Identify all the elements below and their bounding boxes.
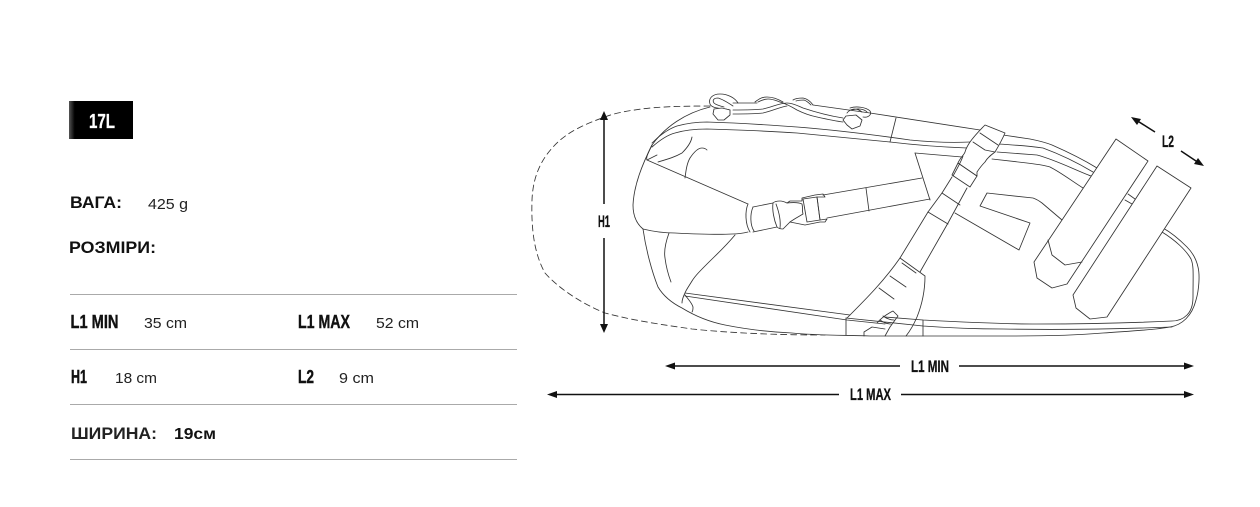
end-cap inner seam — [885, 232, 1193, 324]
bag line drawing — [532, 94, 1199, 336]
lower folds — [665, 233, 671, 282]
compression strap L2 front — [1034, 139, 1148, 288]
spec table: ШИРИНА: — [71, 424, 157, 443]
weight row — [70, 193, 188, 213]
bungee cord loops — [710, 94, 738, 110]
extended roll outline (dashed) — [532, 106, 825, 335]
spec table: H1 — [71, 367, 87, 387]
diagonal strap — [847, 177, 952, 318]
dimension: L1 MAX: L1 MAX — [850, 386, 891, 404]
dimension: L1 MIN — [665, 358, 1194, 376]
dimension: L1 MIN: L1 MIN — [911, 358, 949, 376]
spec table: L1 MAX — [298, 312, 350, 332]
spec table — [70, 294, 517, 460]
spec table: 19см — [174, 426, 216, 443]
dimension: L2: L2 — [1162, 133, 1174, 151]
compression strap L2 rear — [1073, 166, 1191, 319]
top buckle — [952, 163, 977, 187]
dimension: H1: H1 — [598, 213, 610, 231]
side strap buckle — [773, 194, 827, 229]
spec table: 9 cm — [339, 370, 374, 387]
spec table: L1 MIN — [70, 312, 118, 332]
side window cutout — [955, 193, 1062, 250]
shoulder roll — [647, 137, 748, 204]
link between straps — [1125, 194, 1135, 204]
dimensions heading: РОЗМІРИ: — [69, 238, 156, 257]
spec table: L2 — [298, 367, 314, 387]
spec table: 52 cm — [376, 315, 419, 332]
bottom seam details — [846, 311, 923, 336]
volume badge: 17L: 17L — [89, 111, 115, 133]
dimension: L2 — [1131, 117, 1204, 166]
top seam piping — [652, 122, 970, 143]
side compression strap — [753, 178, 930, 232]
weight row: 425 g — [148, 196, 188, 213]
bag body outline — [633, 107, 1199, 336]
dimension: L1 MAX — [547, 386, 1194, 404]
spec table: 35 cm — [144, 315, 187, 332]
top strap and seam continuation — [733, 103, 980, 130]
volume badge: 17L — [69, 101, 133, 139]
weight row: ВАГА: — [70, 193, 122, 212]
dimension: H1 — [598, 111, 610, 333]
spec table: 18 cm — [115, 370, 157, 387]
triangular patch — [915, 153, 930, 200]
cord toggles — [713, 108, 730, 120]
